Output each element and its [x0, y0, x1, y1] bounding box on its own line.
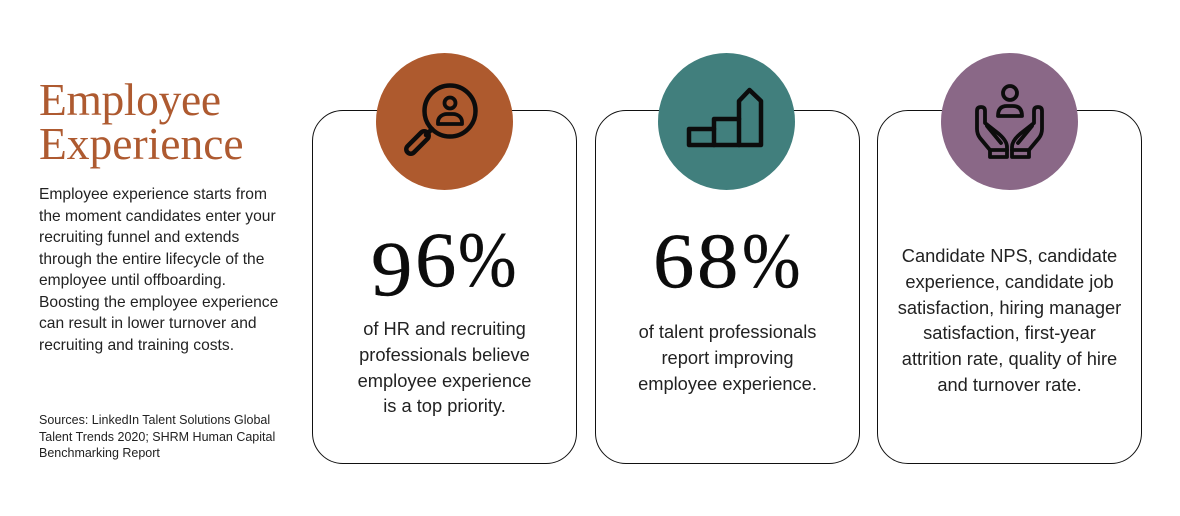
body text: and turnover rate. — [937, 374, 1082, 395]
statistic — [371, 216, 516, 312]
description text: can result in lower turnover and — [39, 315, 257, 332]
statistic: 8 — [696, 217, 738, 304]
icon: hands holding person — [941, 53, 1078, 190]
card outline — [312, 110, 577, 464]
title: Experience — [39, 118, 244, 169]
title — [39, 74, 244, 169]
body text: satisfaction, first-year — [923, 322, 1096, 343]
icon: rising building steps — [658, 53, 795, 190]
title: Employee — [39, 74, 221, 125]
body text: experience, candidate job — [905, 271, 1114, 292]
description text: employee until offboarding. — [39, 272, 226, 289]
body text: employee experience — [358, 370, 531, 391]
card outline — [877, 110, 1142, 464]
statistic: 6 — [415, 216, 456, 303]
sources note: Talent Trends 2020; SHRM Human Capital — [39, 430, 275, 444]
statistic: % — [742, 217, 800, 304]
sources note: Benchmarking Report — [39, 446, 160, 460]
body text — [358, 318, 531, 416]
body text: is a top priority. — [383, 395, 506, 416]
body text: employee experience. — [638, 373, 817, 394]
body text — [638, 321, 817, 394]
body text: of HR and recruiting — [363, 318, 526, 339]
body text: of talent professionals — [639, 321, 816, 342]
description text: through the entire lifecycle of the — [39, 250, 264, 268]
card outline — [595, 110, 860, 464]
description text: Employee experience starts from — [39, 186, 267, 203]
statistic: 9 — [371, 224, 412, 312]
description text: the moment candidates enter your — [39, 208, 276, 224]
body text: attrition rate, quality of hire — [902, 348, 1117, 369]
body text: professionals believe — [359, 344, 530, 365]
icon: magnifying glass over person — [376, 53, 513, 190]
panel: metrics — [877, 53, 1142, 464]
panel: 96 percent — [312, 53, 577, 464]
description text: recruiting and training costs. — [39, 336, 234, 354]
body text: report improving — [661, 347, 794, 368]
sources note — [39, 413, 275, 460]
body text: satisfaction, hiring manager — [898, 297, 1121, 318]
body text: Candidate NPS, candidate — [902, 245, 1117, 266]
description text: recruiting funnel and extends — [39, 229, 239, 246]
panel: 68 percent — [595, 53, 860, 464]
description text — [39, 186, 278, 354]
sources note: Sources: LinkedIn Talent Solutions Global — [39, 413, 270, 427]
statistic: 6 — [653, 217, 694, 304]
body text — [898, 245, 1121, 395]
statistic — [653, 217, 800, 304]
description text: Boosting the employee experience — [39, 294, 278, 310]
statistic: % — [458, 216, 516, 303]
